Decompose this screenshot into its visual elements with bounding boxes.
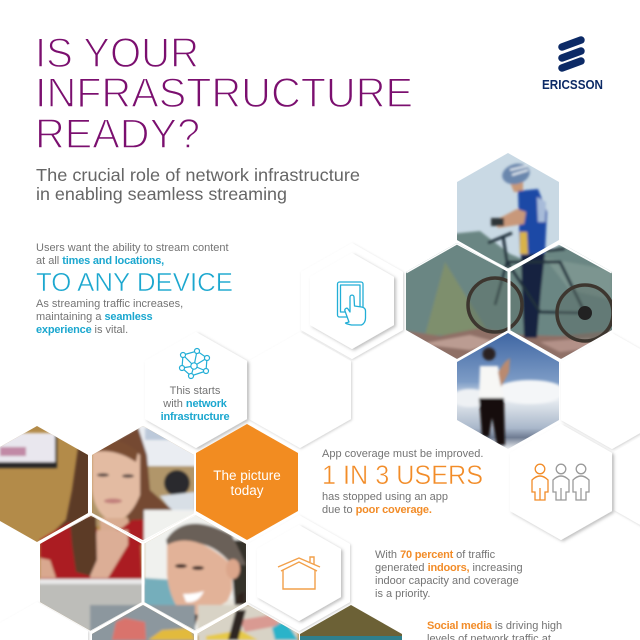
seated woman hair, left hex bbox=[54, 448, 90, 532]
photo: indoor scene with woman and girl bbox=[0, 420, 320, 640]
text block: 1 in 3 users: has stopped using an app bbox=[322, 491, 448, 503]
text: this starts: with network bbox=[162, 398, 228, 410]
subtitle: The crucial role of network infrastructure bbox=[36, 165, 360, 185]
girl background bbox=[144, 510, 248, 635]
title: READY? bbox=[35, 110, 200, 157]
text block: indoors: is a priority. bbox=[375, 588, 430, 600]
neck bbox=[100, 518, 130, 530]
title: IS YOUR bbox=[35, 29, 199, 76]
icon: tablet and hand bbox=[338, 282, 366, 325]
text block: indoors: generated indoors, increasing bbox=[375, 562, 523, 574]
red dress bbox=[38, 516, 146, 580]
laptop bbox=[40, 582, 146, 630]
text block: indoors bbox=[375, 549, 523, 600]
TV bbox=[0, 433, 57, 468]
subtitle: in enabling seamless streaming bbox=[36, 184, 287, 204]
window background bbox=[114, 426, 194, 468]
title: INFRASTRUCTURE bbox=[35, 69, 413, 116]
text block: social media bbox=[427, 620, 562, 640]
photo: woman taking a picture bbox=[452, 333, 565, 449]
man in background bbox=[164, 470, 190, 496]
lower scene bbox=[90, 605, 195, 640]
mountains bbox=[406, 230, 612, 338]
text block: 1 in 3 users: due to poor coverage. bbox=[322, 504, 432, 516]
photo: cyclist with bicycle bbox=[406, 153, 612, 359]
rocks bbox=[400, 328, 620, 360]
panel: house icon hexagon bbox=[248, 515, 350, 631]
icon: house bbox=[278, 557, 320, 589]
empty decorative hexagons bbox=[0, 332, 640, 640]
girl face bbox=[167, 540, 232, 622]
text: this starts: This starts bbox=[170, 385, 221, 397]
icon: network bbox=[180, 348, 210, 378]
panel: the picture today: The picture bbox=[213, 468, 281, 483]
braids bbox=[237, 594, 244, 603]
text block: 1 in 3 users: App coverage must be improved. bbox=[322, 448, 483, 460]
white gaps between indoor hexes bbox=[39, 512, 234, 640]
text block: indoors: indoor capacity and coverage bbox=[375, 575, 519, 587]
text block: to any device: experience is vital. bbox=[36, 324, 128, 336]
text block: to any device bbox=[36, 242, 233, 336]
logo: Ericsson: ERICSSON bbox=[542, 78, 603, 92]
panel: the picture today: today bbox=[230, 483, 264, 498]
text block: to any device: at all times and locations, bbox=[36, 255, 164, 267]
text block: social media: Social media is driving high bbox=[427, 620, 562, 632]
text: this starts bbox=[161, 385, 229, 423]
bike wheels bbox=[468, 278, 613, 341]
white gaps between bike hexes bbox=[406, 243, 612, 330]
panel: people icon hexagon bbox=[510, 424, 612, 540]
eyes & lips bbox=[97, 473, 134, 478]
title bbox=[35, 29, 413, 157]
panel: tablet icon hexagon bbox=[301, 243, 403, 359]
girl hair bbox=[166, 524, 246, 565]
cyclist bbox=[509, 180, 523, 192]
text block: to any device: As streaming traffic increases, bbox=[36, 298, 183, 310]
subtitle bbox=[36, 165, 360, 204]
text: this starts: infrastructure bbox=[161, 411, 229, 423]
text block: 1 in 3 users bbox=[322, 448, 483, 516]
bike frame bbox=[488, 233, 585, 313]
panel: network infrastructure hexagon bbox=[145, 332, 247, 448]
panel: the picture today bbox=[196, 424, 298, 540]
text block: indoors: With 70 percent of traffic bbox=[375, 549, 496, 561]
face bbox=[92, 442, 140, 522]
text block: 1 in 3 users: 1 IN 3 USERS bbox=[322, 460, 483, 490]
text block: to any device: Users want the ability to stream content bbox=[36, 242, 229, 254]
hair bbox=[114, 428, 172, 524]
text block: to any device: TO ANY DEVICE bbox=[36, 267, 233, 297]
logo: Ericsson bbox=[542, 40, 603, 92]
icon: three people bbox=[532, 464, 589, 500]
photo: dark aerial hexagon bbox=[300, 605, 402, 640]
text block: to any device: maintaining a seamless bbox=[36, 311, 153, 323]
